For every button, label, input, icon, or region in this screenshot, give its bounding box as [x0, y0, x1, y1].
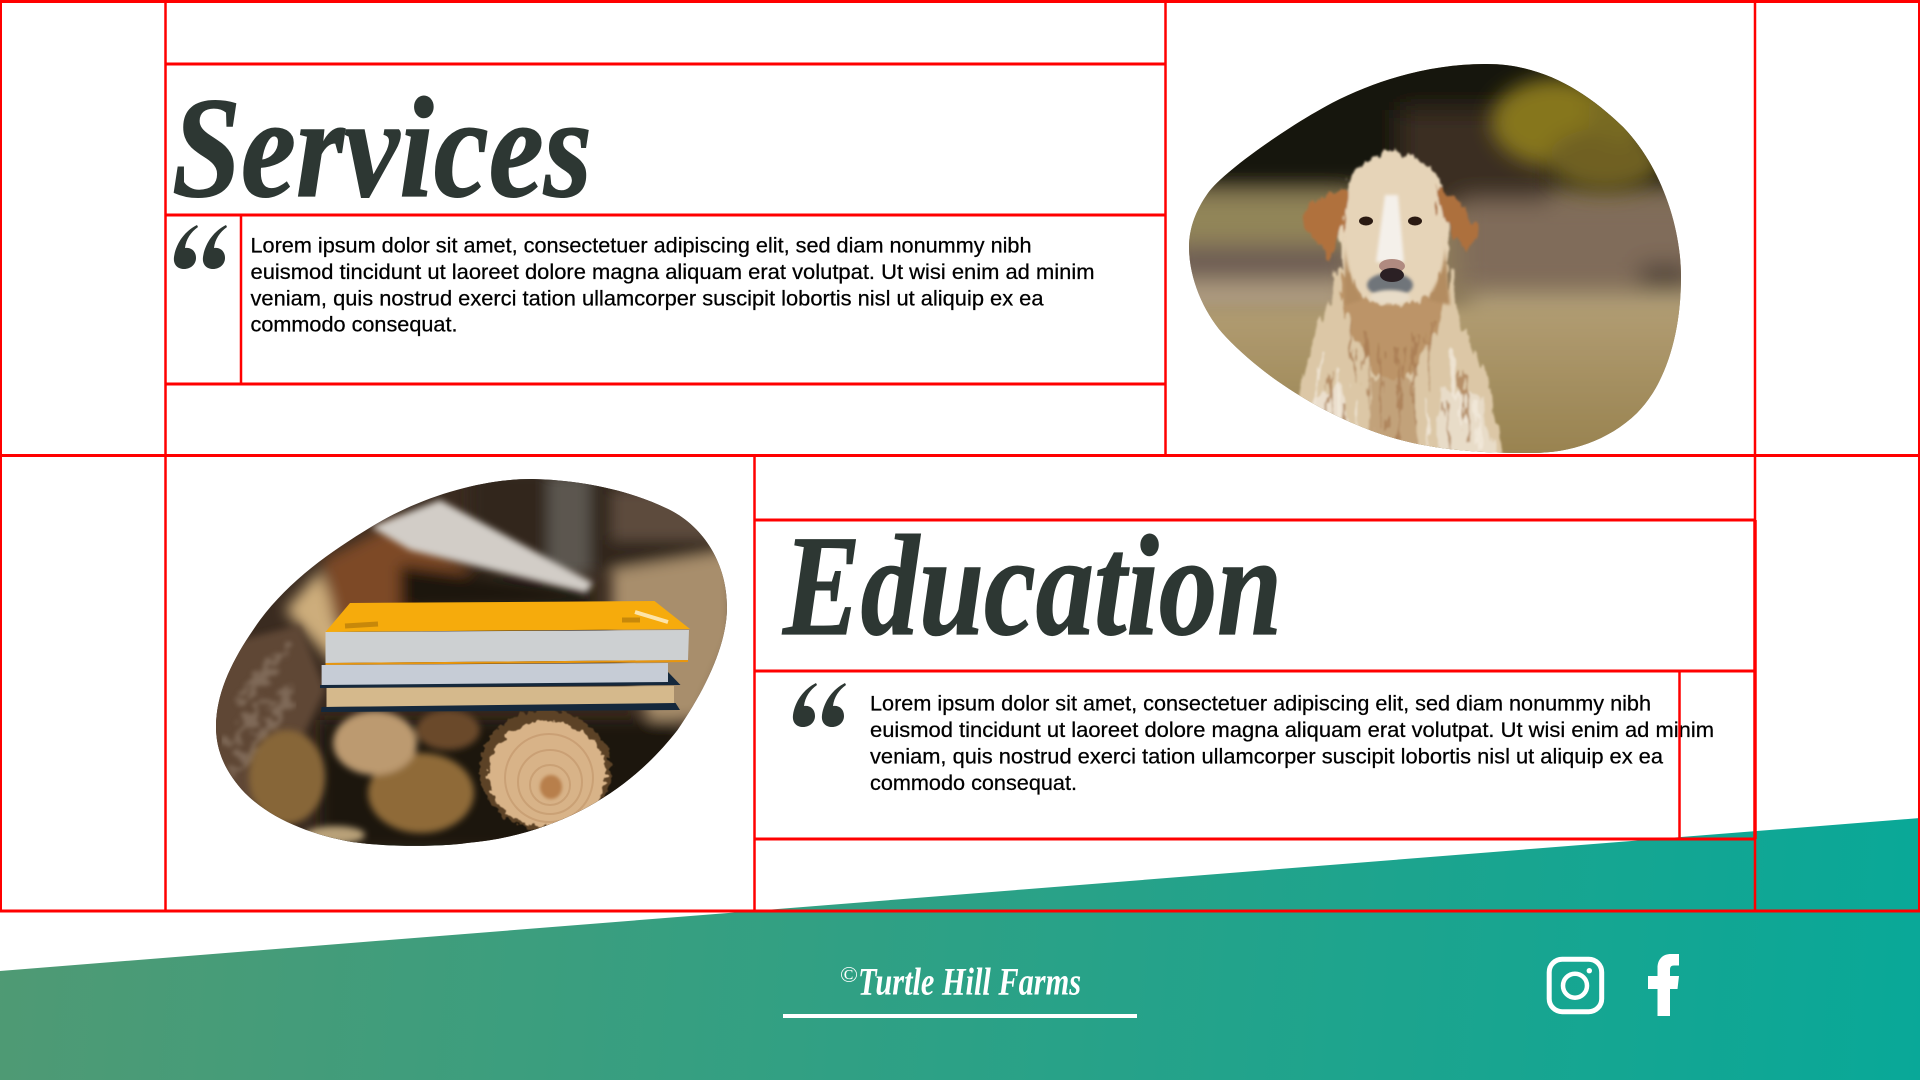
- text block: Services body: euismod tincidunt ut laoreet dolore magna aliquam erat volutpat. Ut wisi enim ad minim: [250, 261, 1094, 284]
- text block: Education body: veniam, quis nostrud exerci tation ullamcorper suscipit lobortis nisl ut aliquip ex ea: [870, 746, 1663, 768]
- footer brand: Turtle Hill Farms with underline: Turtle Hill Farms: [858, 960, 1081, 1004]
- heading: Education: Education: [781, 507, 1282, 666]
- text block: Education body: commodo consequat.: [870, 772, 1077, 795]
- text block: Education body: euismod tincidunt ut laoreet dolore magna aliquam erat volutpat. Ut wisi enim ad minim: [870, 719, 1714, 742]
- icon: Instagram: [1549, 959, 1602, 1012]
- big cut log with rings: [479, 710, 611, 830]
- icon: Facebook: [1648, 954, 1679, 1016]
- photo: wet golden dog in a field: [1189, 64, 1681, 453]
- text block: Education body: Lorem ipsum dolor sit amet, consectetuer adipiscing elit, sed diam nonummy nibh: [870, 692, 1651, 716]
- text block: Services body: commodo consequat.: [250, 314, 458, 336]
- icon: Education quotation mark: [793, 683, 846, 727]
- text block: Services body: veniam, quis nostrud exerci tation ullamcorper suscipit lobortis nisl ut aliquip ex ea: [250, 288, 1044, 310]
- footer brand: Turtle Hill Farms with underline: [783, 960, 1137, 1018]
- dog: [1292, 153, 1505, 470]
- text block: Education body: [870, 692, 1714, 795]
- photo: stack of books on logs: [200, 470, 740, 855]
- heading: Services: Services: [172, 69, 592, 228]
- footer brand: Turtle Hill Farms with underline: ©: [840, 962, 858, 987]
- text block: Services body: Lorem ipsum dolor sit amet, consectetuer adipiscing elit, sed diam nonummy nibh: [250, 234, 1032, 258]
- footer gradient band: [0, 818, 1920, 1080]
- icon: Services quotation mark: [174, 225, 227, 269]
- text block: Services body: [250, 234, 1094, 336]
